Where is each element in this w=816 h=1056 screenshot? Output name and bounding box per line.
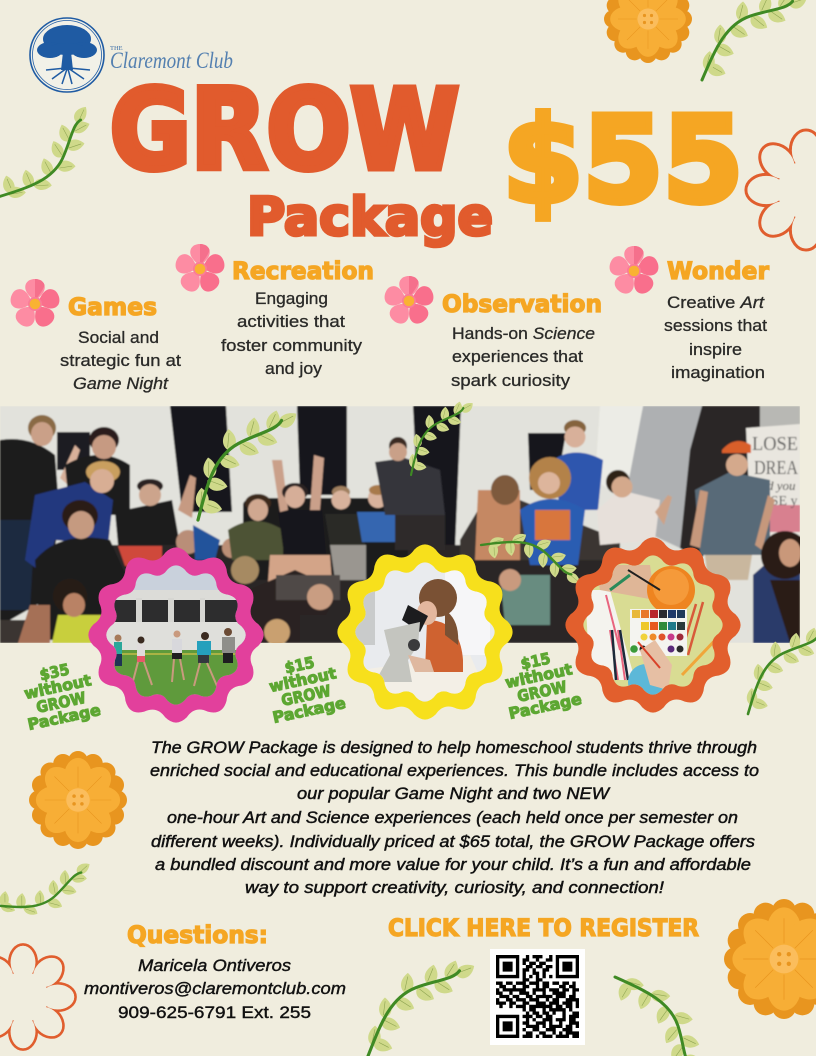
icon: pink flower [173, 244, 227, 295]
panel: Observation [382, 276, 602, 390]
text: Observation description: experiences that [452, 347, 583, 366]
price: $55: $55 [503, 91, 743, 229]
text: Games description: strategic fun at [60, 351, 181, 370]
icon: orange flower left [29, 751, 127, 849]
sign: LOSE [752, 433, 798, 455]
text: Recreation description [221, 289, 363, 378]
text: description paragraph: way to support creativity, curiosity, and connection! [245, 879, 664, 897]
group photo [0, 406, 809, 645]
text: Wonder description [664, 293, 767, 382]
icon: orange flower top [604, 0, 692, 63]
label: $15 without GROW Package (art): Package [507, 690, 583, 723]
text: contact details [84, 956, 346, 1022]
heading: Wonder: Wonder [667, 257, 769, 285]
icon: outline flower lower left [0, 944, 76, 1050]
text: contact details: Maricela Ontiveros [138, 956, 292, 975]
text: Wonder description: imagination [671, 363, 765, 382]
text: Recreation description: activities that [237, 312, 345, 331]
photo circle: game night (pink frame) [88, 547, 264, 723]
label: $15 without GROW Package (art): without [504, 660, 574, 692]
label: $35 without GROW Package: Package [26, 701, 102, 734]
text: description paragraph: one-hour Art and Science experiences (each held once per semester on [167, 809, 738, 827]
text: description paragraph: a bundled discount and more value for your child. It’s a fun and affordable [155, 856, 751, 874]
text: Wonder description: sessions that [664, 316, 767, 335]
text: Observation description: Hands-on Science [452, 324, 595, 343]
label: $15 without GROW Package (science): Package [271, 694, 347, 727]
photo circle: science (yellow frame) [337, 544, 513, 720]
logo: The Claremont Club: Claremont Club [110, 48, 233, 73]
label: $15 without GROW Package (science): $15 [283, 654, 316, 677]
sign: LOSE y [752, 494, 798, 509]
label: $35 without GROW Package [17, 656, 102, 734]
people center [115, 500, 180, 545]
icon: vine on photo center [391, 384, 477, 481]
panel: Recreation [173, 244, 374, 378]
icon: orange flower bottom right [724, 899, 816, 1019]
people left [0, 439, 60, 620]
icon: vine right of photo [724, 605, 816, 722]
people right [553, 452, 603, 510]
label: $15 without GROW Package (art): $15 [519, 650, 552, 673]
heading: click here to register: CLICK HERE TO REGISTER [388, 914, 699, 942]
label: $15 without GROW Package (science): GROW [280, 682, 332, 710]
label: $35 without GROW Package: without [23, 671, 93, 703]
logo: The Claremont Club [30, 18, 233, 92]
text: Wonder description: Creative Art [667, 293, 765, 312]
text: description paragraph: our popular Game Night and two NEW [297, 785, 611, 803]
text: Games description: Game Night [73, 374, 169, 393]
text: description paragraph: The GROW Package is designed to help homeschool students thrive through [151, 739, 757, 757]
icon: pink flower [8, 279, 62, 330]
text: Games description [60, 328, 181, 393]
sign [744, 424, 800, 534]
icon: vine bottom right [605, 953, 730, 1056]
text: Wonder description: inspire [689, 340, 742, 359]
text: contact details: 909-625-6791 Ext. 255 [118, 1003, 311, 1022]
icon: pink flower [607, 246, 661, 297]
text: description paragraph: different weeks). Individually priced at $65 total, the GROW Package offers [151, 833, 755, 851]
text: Recreation description: foster community [221, 336, 363, 355]
title: Package: Package [247, 187, 493, 248]
panel: Games [8, 279, 181, 393]
text: Recreation description: and joy [265, 359, 323, 378]
icon: vine lower left [0, 858, 102, 932]
icon: pink flower [382, 276, 436, 327]
text: Recreation description: Engaging [255, 289, 328, 308]
label: $15 without GROW Package (art) [498, 645, 583, 723]
text: description paragraph [150, 739, 759, 897]
text: description paragraph: enriched social and educational experiences. This bundle includes access to [150, 762, 759, 780]
text: contact details: montiveros@claremontclub.com [84, 979, 346, 998]
QR code [490, 949, 585, 1045]
text: Observation description: spark curiosity [451, 371, 571, 390]
heading: Observation: Observation [442, 290, 602, 318]
panel: Wonder [607, 246, 769, 382]
icon: vine left [0, 101, 114, 222]
heading: Questions: Questions: [127, 921, 268, 949]
icon: outline flower right [746, 130, 816, 250]
icon: vine on photo left [168, 383, 303, 529]
logo: The Claremont Club: THE [110, 45, 123, 52]
photo circle: art (orange frame) [565, 537, 741, 713]
label: $15 without GROW Package (science): without [268, 664, 338, 696]
text: Games description: Social and [78, 328, 159, 347]
icon: vine top right [678, 0, 813, 90]
heading: Games: Games [68, 293, 157, 321]
icon: vine bottom center [342, 932, 480, 1056]
heading: Recreation: Recreation [232, 257, 374, 285]
title: GROW: GROW [110, 66, 459, 194]
icon: vine on photo right [478, 517, 591, 588]
text: Observation description [451, 324, 595, 390]
label: $35 without GROW Package: $35 [38, 661, 71, 684]
label: $15 without GROW Package (science) [262, 649, 347, 727]
label: $35 without GROW Package: GROW [35, 689, 87, 717]
sign: DREA [754, 457, 798, 479]
sign: and you [754, 478, 796, 493]
label: $15 without GROW Package (art): GROW [516, 678, 568, 706]
